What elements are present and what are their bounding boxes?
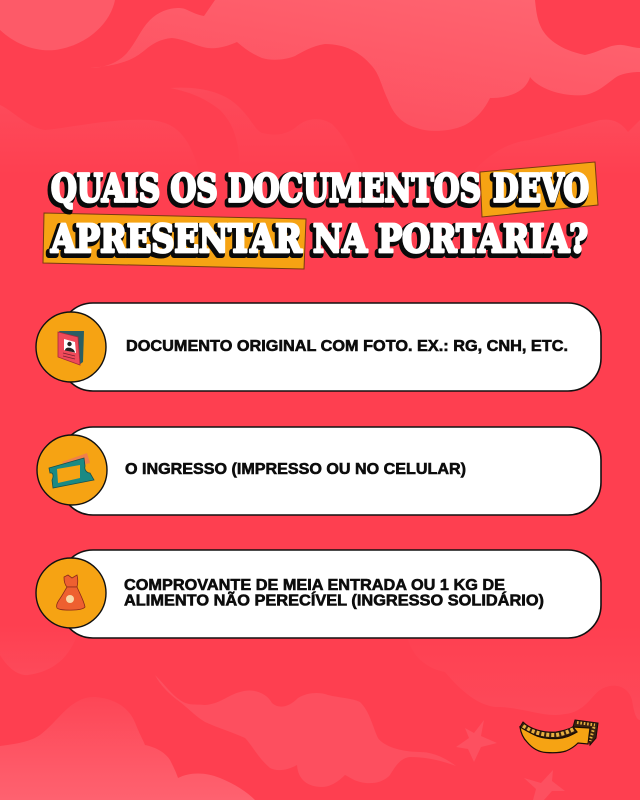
title: NA PORTARIA? bbox=[313, 216, 588, 261]
highlight: DEVO bbox=[480, 162, 598, 217]
title: APRESENTAR bbox=[48, 218, 300, 264]
title: DEVO bbox=[491, 168, 587, 213]
title: QUAIS OS DOCUMENTOS bbox=[49, 168, 479, 213]
title: NA PORTARIA? bbox=[311, 218, 586, 264]
text: comprovante: COMPROVANTE DE MEIA ENTRADA OU 1 KG DE bbox=[124, 577, 505, 594]
arrow bbox=[520, 720, 598, 753]
title bbox=[48, 166, 589, 264]
text: ingresso: O INGRESSO (IMPRESSO OU NO CELULAR) bbox=[125, 461, 466, 478]
icon badge: comprovante bbox=[36, 558, 106, 628]
icon: id document bbox=[58, 331, 84, 365]
icon: bag bbox=[57, 575, 85, 610]
icon badge: documento bbox=[36, 312, 106, 382]
panel: documento bbox=[36, 303, 601, 391]
text: comprovante: ALIMENTO NÃO PERECÍVEL (INGRESSO SOLIDÁRIO) bbox=[124, 590, 544, 610]
text: comprovante bbox=[124, 577, 544, 610]
title: APRESENTAR bbox=[50, 216, 302, 261]
title: QUAIS OS DOCUMENTOS bbox=[51, 166, 481, 210]
text: documento: DOCUMENTO ORIGINAL COM FOTO. EX.: RG, CNH, ETC. bbox=[126, 338, 568, 355]
icon: ticket bbox=[49, 453, 94, 488]
icon badge: ingresso bbox=[37, 435, 107, 505]
panel: ingresso bbox=[37, 427, 601, 515]
title: DEVO bbox=[493, 166, 589, 210]
panel: comprovante bbox=[36, 550, 601, 638]
highlight: APRESENTAR bbox=[43, 213, 306, 269]
